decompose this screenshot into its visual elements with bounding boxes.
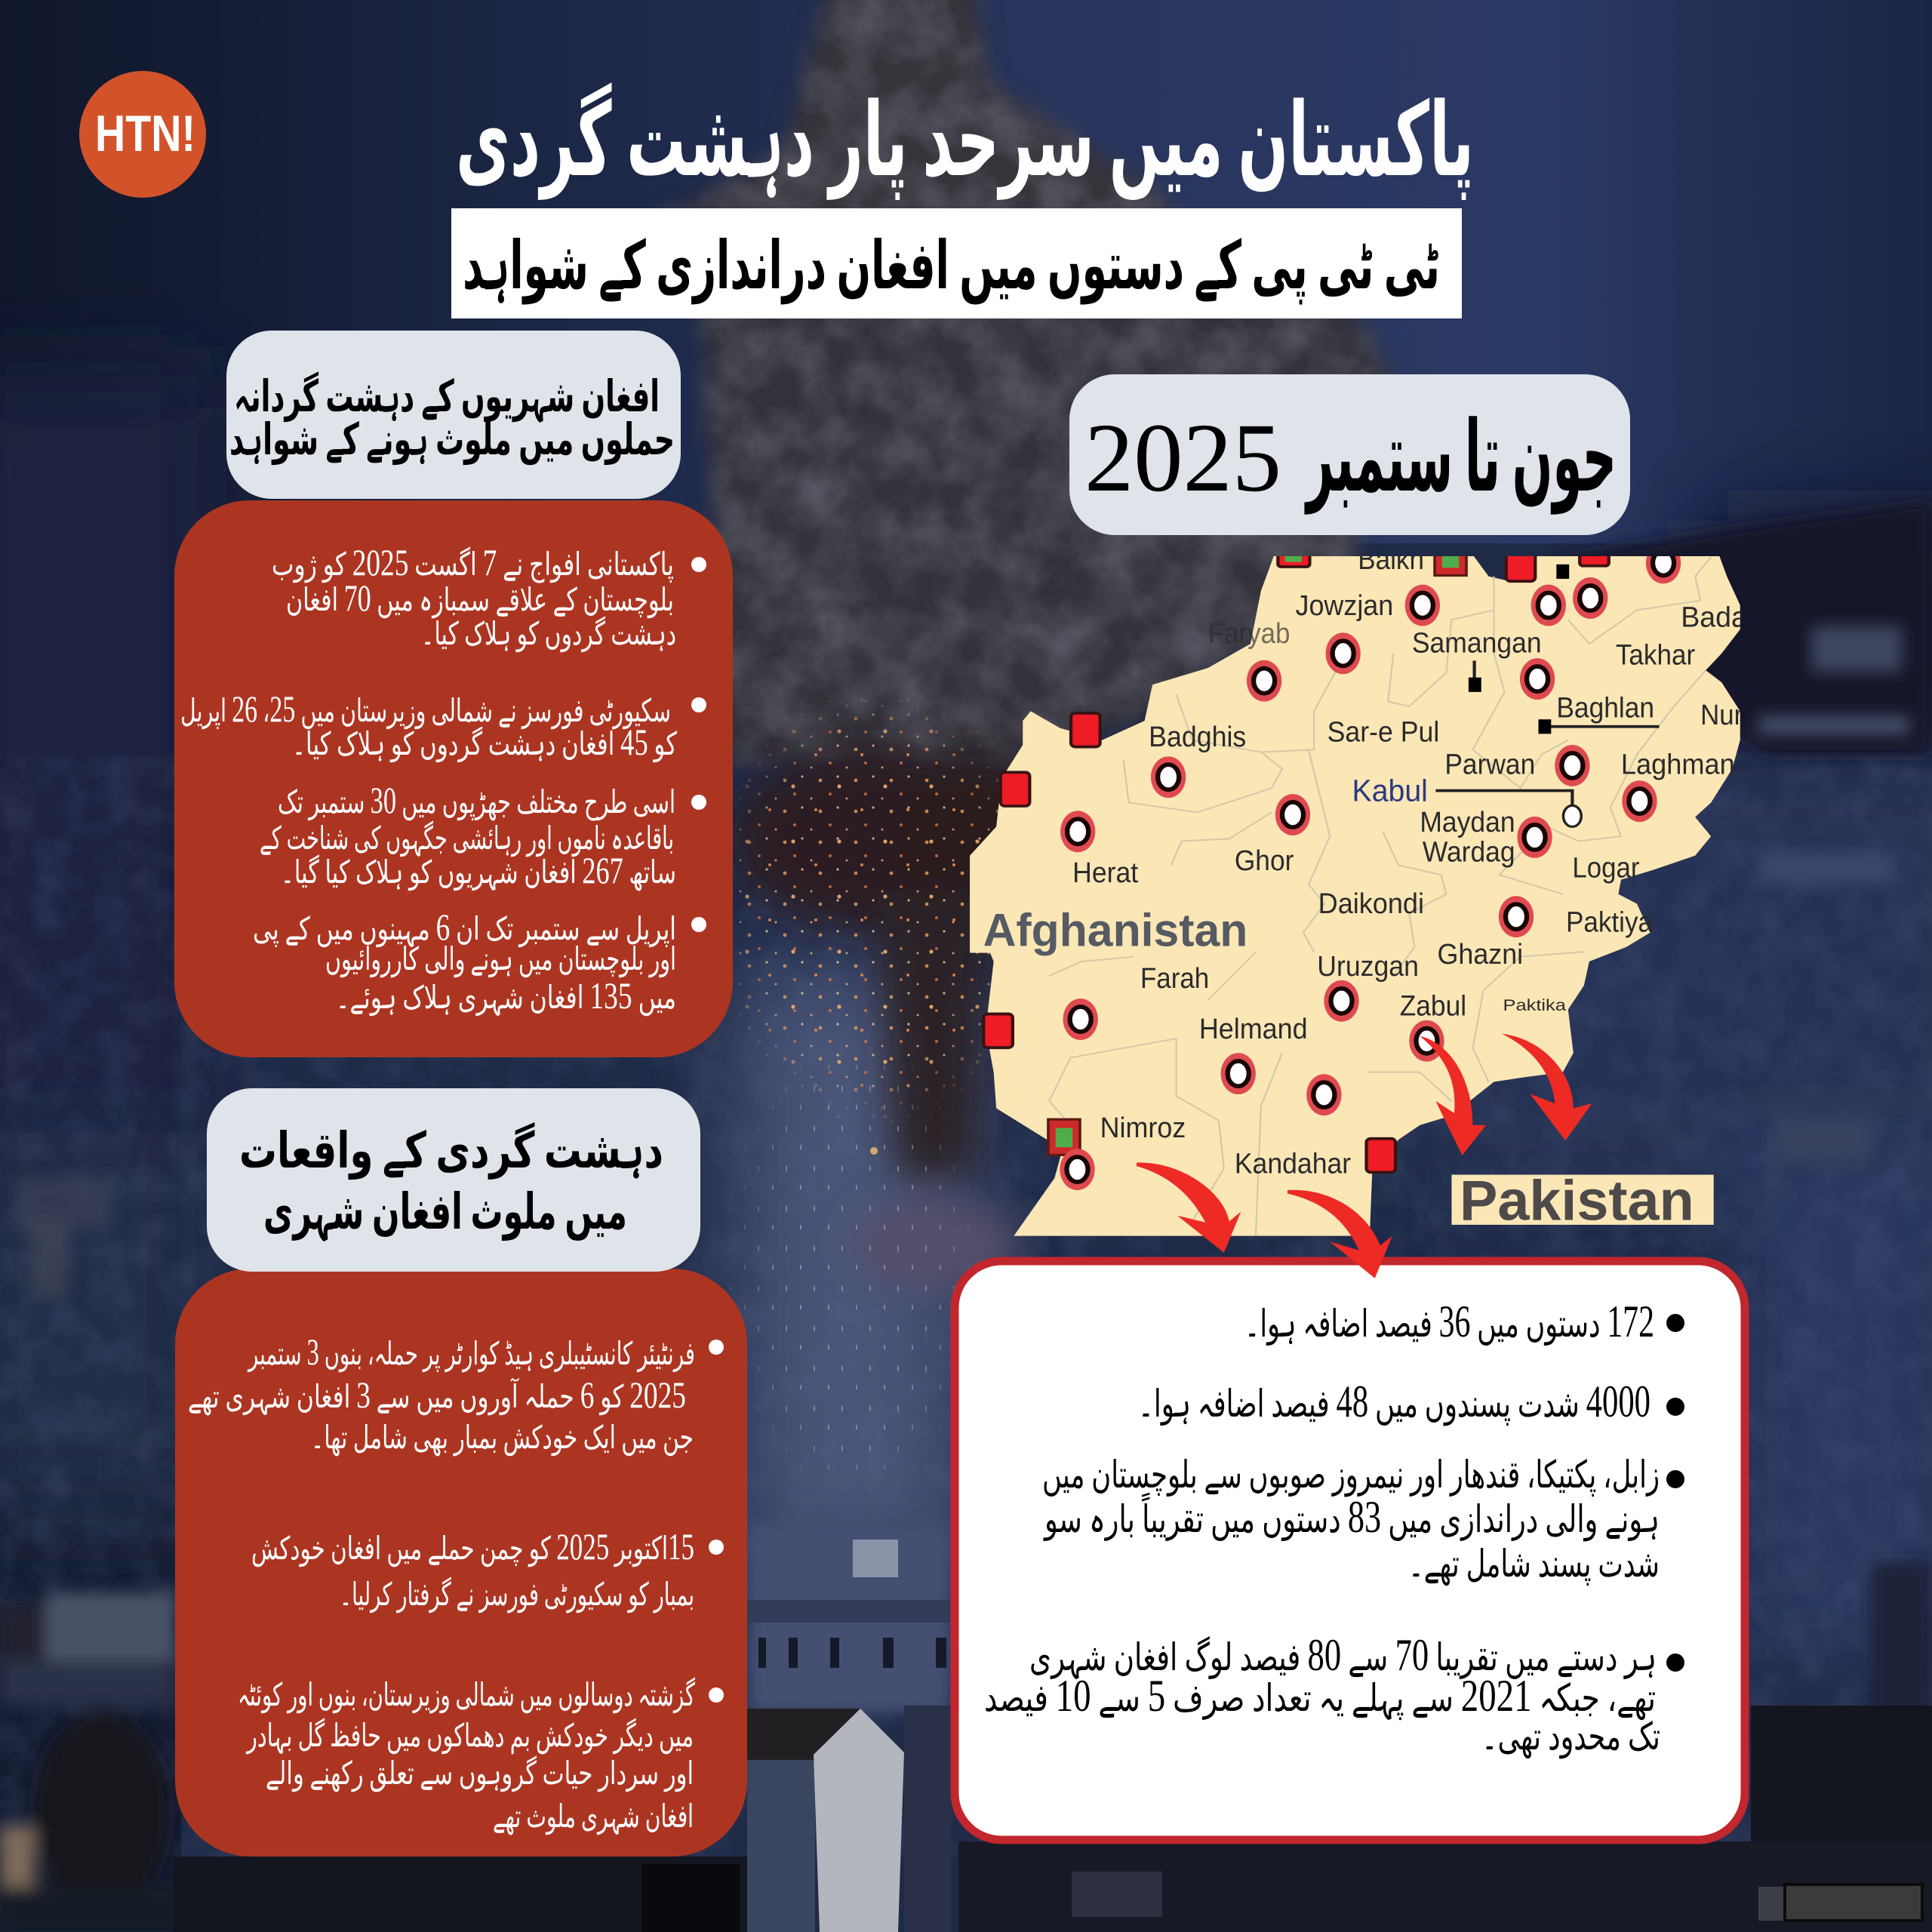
- bullet: two years suicide bombings: میں دیگر خودکش بم دھماکوں میں حافظ گل بہادر: [246, 1718, 694, 1755]
- province labels: Takhar: [1616, 638, 1695, 671]
- bullet: Bannu 3 September: فرنٹیئر کانسٹیبلری ہیڈ کوارٹر پر حملہ، بنوں 3 ستمبر: [248, 1331, 695, 1373]
- smoke main cloud: [702, 302, 1396, 762]
- bullet: 267 Afghan citizens: اسی طرح مختلف جھڑپوں میں 30 ستمبر تک: [278, 779, 675, 821]
- leader lines and small black markers: [1435, 565, 1659, 826]
- province labels: Helmand: [1199, 1013, 1308, 1045]
- date box: June to September 2025: 2025: [1084, 404, 1281, 512]
- bullet: 4000 militants: 4000 شدت پسندوں میں 48 فیصد اضافہ ہوا۔: [1138, 1377, 1651, 1426]
- smoke top plume: [649, 0, 1192, 226]
- province labels: Logar: [1572, 851, 1639, 884]
- bullet: North Waziristan 25 26 April: کو 45 افغان دہشت گردوں کو ہلاک کیا۔: [292, 721, 677, 763]
- dark ember base and stem: [732, 747, 1064, 1291]
- arrow: Zabul to Pakistan: [1420, 1036, 1486, 1155]
- province labels: Zabul: [1400, 989, 1466, 1022]
- date box: June to September 2025: [1069, 374, 1630, 535]
- province labels: Laghman: [1621, 748, 1735, 780]
- bullet: 135 Afghan citizens: اپریل سے ستمبر تک ان 6 مہینوں میں کے پی: [253, 906, 676, 948]
- bullet: Bannu 3 September: 2025 کو 6 حملہ آوروں میں سے 3 افغان شہری تھے: [188, 1374, 686, 1416]
- province labels: Faryab: [1208, 617, 1290, 649]
- sparks: [730, 683, 1008, 1491]
- logo: HTN: [79, 71, 206, 198]
- bullet: 267 Afghan citizens: [260, 779, 706, 891]
- dark hill on the right: [1555, 502, 1932, 755]
- buildings centre: [174, 1524, 951, 1932]
- province labels: [1072, 543, 1747, 1180]
- buildings right: [958, 626, 1932, 1932]
- panel heading: incidents: دہشت گردی کے واقعات: [239, 1121, 663, 1180]
- bullet: two years suicide bombings: گزشتہ دوسالوں میں شمالی وزیرستان، بنوں اور کوئٹہ: [238, 1677, 695, 1713]
- bullet: 70 to 80 percent Afghan: تھے، جبکہ 2021 سے پہلے یہ تعداد صرف 5 سے 10 فیصد: [984, 1671, 1656, 1721]
- bullet: two years suicide bombings: افغان شہری ملوث تھے: [493, 1800, 694, 1835]
- province labels: Paktiya: [1566, 906, 1654, 938]
- province labels: Daikondi: [1318, 888, 1424, 920]
- bullet: Bannu 3 September: [188, 1331, 724, 1457]
- bullet: 83 groups from four provinces: زابل، پکتیکا، قندھار اور نیمروز صوبوں سے بلوچستان میں: [1042, 1454, 1660, 1497]
- subtitle banner: [451, 208, 1462, 318]
- bullet: 70 to 80 percent Afghan: تک محدود تھی۔: [1481, 1715, 1660, 1759]
- bullet: 83 groups from four provinces: شدت پسند شامل تھے۔: [1408, 1543, 1660, 1586]
- province labels: Parwan: [1444, 748, 1535, 780]
- bullet: 70 to 80 percent Afghan: [984, 1630, 1684, 1759]
- label: Afghanistan: Afghanistan: [983, 904, 1247, 956]
- panel: Afghan citizens evidence: [174, 331, 733, 1057]
- panel heading: evidence: افغان شہریوں کے دہشت گردانہ: [234, 371, 660, 423]
- bullet: 172 groups: 172 دستوں میں 36 فیصد اضافہ ہوا۔: [1244, 1297, 1654, 1346]
- buildings left: [0, 1177, 755, 1932]
- panel heading: incidents: میں ملوث افغان شہری: [263, 1185, 627, 1242]
- province labels: Kandahar: [1235, 1147, 1351, 1180]
- bullet: 83 groups from four provinces: [1042, 1454, 1684, 1586]
- bullet: 135 Afghan citizens: میں 135 افغان شہری ہلاک ہوئے۔: [336, 974, 676, 1017]
- bullet: 267 Afghan citizens: باقاعدہ ناموں اور رہائشی جگہوں کی شناخت کے: [260, 820, 674, 857]
- green square markers: [1048, 548, 1466, 1155]
- panel heading: evidence: [226, 331, 681, 499]
- province labels: Herat: [1072, 857, 1138, 888]
- bullet: Bannu 3 September: جن میں ایک خودکش بمبار بھی شامل تھا۔: [311, 1421, 694, 1457]
- province labels: Nimroz: [1100, 1112, 1186, 1143]
- province labels: Ghor: [1235, 844, 1294, 876]
- province labels: Wardag: [1423, 835, 1515, 868]
- map outline: [970, 548, 1740, 1238]
- mottled city texture: [0, 755, 1932, 1857]
- arrow: Nimroz to stats panel: [1137, 1163, 1241, 1253]
- panel heading: evidence: حملوں میں ملوث ہونے کے شواہد: [229, 415, 675, 466]
- province labels: Uruzgan: [1317, 950, 1419, 983]
- province borders: [1049, 557, 1711, 1236]
- bullet: Zhob 7 August: پاکستانی افواج نے 7 اگست 2025 کو ژوب: [272, 541, 674, 583]
- province labels: Nur: [1700, 699, 1743, 731]
- panel: infiltration statistics: [955, 1261, 1745, 1840]
- bullet: 70 to 80 percent Afghan: ہر دستے میں تقریبا 70 سے 80 فیصد لوگ افغان شہری: [1029, 1630, 1657, 1680]
- bullet: Zhob 7 August: بلوچستان کے علاقے سمبازہ میں 70 افغان: [286, 577, 674, 619]
- logo: HTN: HTN!: [95, 105, 195, 162]
- grey box bottom right: [1785, 1884, 1922, 1921]
- bullet: two years suicide bombings: اور سردار حیات گروہوں سے تعلق رکھنے والے: [266, 1755, 694, 1792]
- province labels: Paktika: [1503, 995, 1566, 1014]
- bullet: 135 Afghan citizens: [253, 906, 706, 1017]
- bullet: Chaman 15 October: بمبار کو سکیورٹی فورسز نے گرفتار کرلیا۔: [340, 1577, 694, 1613]
- bullet: North Waziristan 25 26 April: [180, 688, 706, 763]
- bullet: Chaman 15 October: 15اکتوبر 2025 کو چمن حملے میں افغان خودکش: [251, 1525, 694, 1567]
- red square markers: [983, 543, 1609, 1172]
- bullet: two years suicide bombings: [238, 1677, 724, 1835]
- bullet: 267 Afghan citizens: ساتھ 267 افغان شہریوں کو ہلاک کیا گیا۔: [281, 849, 676, 891]
- province labels: Farah: [1140, 962, 1209, 995]
- panel: terror incidents: [175, 1088, 747, 1857]
- map: Afghanistan provinces: [970, 542, 1747, 1253]
- date box: June to September 2025: جون تا ستمبر: [1304, 404, 1617, 515]
- bullet: Zhob 7 August: [272, 541, 706, 652]
- arrow: Kandahar to stats panel: [1287, 1190, 1392, 1278]
- province labels: Badghis: [1149, 721, 1246, 752]
- panel heading: incidents: [207, 1088, 700, 1272]
- bullet: Zhob 7 August: دہشت گردوں کو ہلاک کیا۔: [421, 616, 676, 652]
- province labels: Bada: [1681, 601, 1747, 633]
- province labels: Kabul: [1352, 774, 1428, 808]
- province labels: Maydan: [1420, 806, 1515, 838]
- ring markers: [1060, 542, 1681, 1190]
- province labels: Balkh: [1358, 543, 1424, 576]
- arrow: Paktika to Pakistan: [1502, 1034, 1592, 1140]
- province labels: Sar-e Pul: [1327, 715, 1439, 748]
- bullet: Chaman 15 October: [251, 1525, 724, 1613]
- province labels: Ghazni: [1437, 938, 1523, 971]
- bullet: 83 groups from four provinces: ہونے والی دراندازی میں 83 دستوں میں تقریباً بارہ سو: [1043, 1492, 1660, 1542]
- label: Pakistan: Pakistan: [1460, 1168, 1694, 1232]
- province labels: Jowzjan: [1295, 589, 1393, 621]
- bullet: 135 Afghan citizens: اور بلوچستان میں ہونے والی کارروائیوں: [325, 943, 676, 977]
- province labels: Samangan: [1412, 626, 1542, 659]
- province labels: Baghlan: [1556, 691, 1654, 724]
- bullet: North Waziristan 25 26 April: سکیورٹی فورسز نے شمالی وزیرستان میں 25، 26 اپریل: [180, 688, 671, 730]
